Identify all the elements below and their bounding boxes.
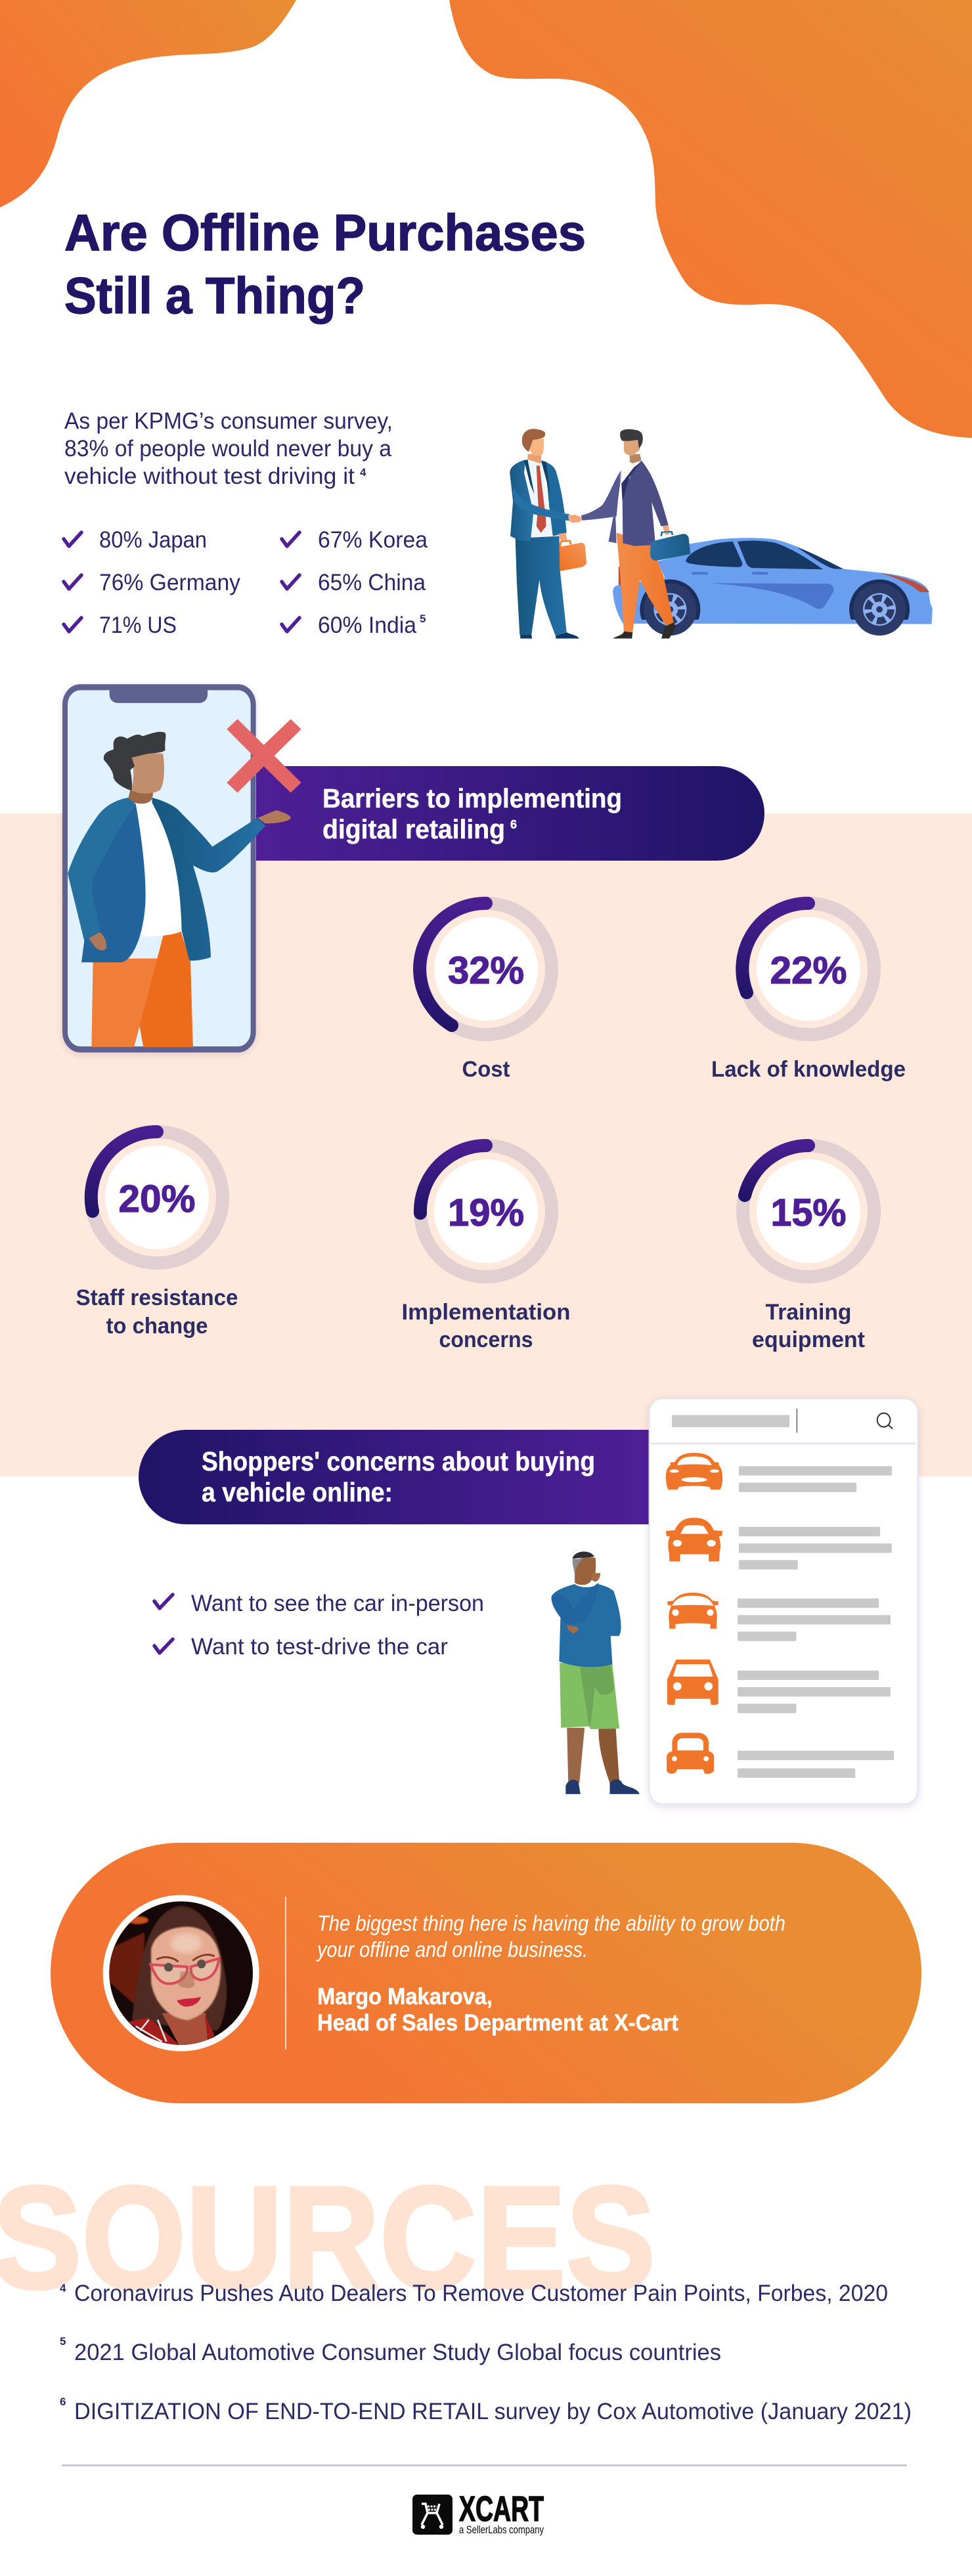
ring: lack of knowledge 22%: 22% [770,949,847,992]
check item: Japan: 80% Japan [99,527,207,553]
man in purple jacket [568,429,690,639]
check item: India: 60% India [318,612,417,638]
thinking man [552,1552,640,1794]
title: Are Offline Purchases [64,204,586,261]
illustration: search panel and thinking man [552,1399,917,1804]
ring: staff resistance 20%: Staff resistance [76,1285,238,1310]
quote text: Margo Makarova, [317,1984,493,2009]
check item: China: 65% China [318,570,426,595]
man [68,732,291,1047]
ring: training equipment 15%: equipment [752,1327,865,1352]
title [64,204,586,324]
ring: lack of knowledge 22%: Lack of knowledge [711,1057,906,1082]
check item: test-drive: Want to test-drive the car [191,1634,448,1660]
illustration: handshake and car [510,429,933,639]
ring: cost 32% [420,903,552,1082]
phone [65,687,254,1050]
icon: red X [227,719,301,793]
car [613,538,933,639]
banner: shoppers' concerns [139,1430,652,1524]
portrait photo [103,1895,259,2051]
ring: staff resistance 20% [76,1132,238,1339]
check item: Korea: 67% Korea [318,527,428,553]
check item: Germany: 76% Germany [99,570,240,595]
result row 5 [667,1732,894,1778]
intro text: As per KPMG’s consumer survey, [64,408,393,434]
logo: X-Cart: XCART [459,2489,544,2529]
result row 2 [666,1518,892,1570]
intro text [64,408,393,489]
logo: X-Cart: a SellerLabs company [459,2523,544,2536]
ring: training equipment 15%: 15% [771,1191,846,1234]
ring: training equipment 15% [743,1146,874,1352]
ring: staff resistance 20%: 20% [118,1178,196,1220]
result row 3 [667,1593,891,1641]
ring: implementation concerns 19% [402,1146,570,1352]
reference 4: 4 [60,2282,66,2294]
intro text: 4 [360,466,366,479]
man in blue suit [510,429,586,639]
check item: see in person: Want to see the car in-person [191,1591,484,1616]
sources heading: SOURCES [0,2157,655,2319]
illustration: man in phone [65,687,301,1050]
top left orange blob [0,0,296,207]
reference 6: DIGITIZATION OF END-TO-END RETAIL survey by Cox Automotive (January 2021) [74,2399,912,2424]
ring: implementation concerns 19%: Implementation [402,1300,570,1325]
result row 4 [667,1660,891,1713]
reference 5: 2021 Global Automotive Consumer Study Global focus countries [74,2340,721,2365]
ring: training equipment 15%: Training [766,1300,851,1325]
intro text: 83% of people would never buy a [64,436,392,462]
banner: barriers: Barriers to implementing [322,783,622,813]
check item: India: 5 [420,612,426,625]
ring: lack of knowledge 22% [711,903,906,1082]
ring: cost 32%: 32% [448,949,524,992]
banner: shoppers' concerns: a vehicle online: [202,1477,393,1507]
quote text: Head of Sales Department at X-Cart [317,2010,678,2036]
source references [60,2281,912,2424]
icon: cart [422,2504,443,2527]
result row 1 [666,1453,892,1492]
search bar [672,1409,893,1432]
quote text: The biggest thing here is having the ability to grow both [317,1911,785,1935]
check item: US [64,612,177,638]
reference 4: Coronavirus Pushes Auto Dealers To Remove Customer Pain Points, Forbes, 2020 [74,2281,888,2306]
banner: barriers: digital retailing [322,814,505,844]
reference 5: 5 [60,2335,66,2348]
logo: X-Cart [412,2489,544,2536]
reference 6: 6 [60,2395,66,2408]
top right orange blob [449,0,972,438]
quote text: your offline and online business. [316,1937,588,1962]
quote text [316,1911,785,2036]
ring: staff resistance 20%: to change [106,1314,208,1339]
ring: implementation concerns 19%: concerns [439,1327,533,1352]
intro text: vehicle without test driving it [64,463,355,489]
ring: cost 32%: Cost [462,1057,510,1082]
country checklist [64,527,428,638]
check item: US: 71% US [99,612,177,638]
peach background band [0,813,972,1476]
banner: barriers [256,766,764,861]
shoppers' concerns checklist [154,1591,484,1660]
banner: shoppers' concerns: Shoppers' concerns about buying [202,1446,595,1476]
quote panel [51,1843,921,2103]
banner: barriers: 6 [510,818,517,831]
ring: implementation concerns 19%: 19% [448,1191,524,1234]
title: Still a Thing? [64,267,365,324]
search results panel [650,1399,917,1804]
